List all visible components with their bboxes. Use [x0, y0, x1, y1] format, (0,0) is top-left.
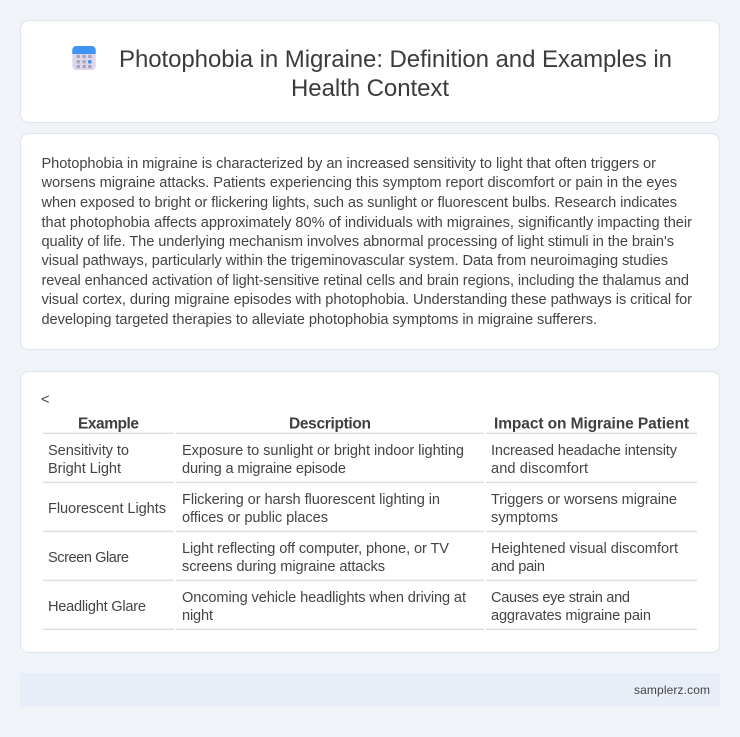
table row: sensitivity to bright light: Bright Light [48, 461, 121, 477]
table row: fluorescent lights: Fluorescent Lights [48, 501, 166, 517]
table row: headlight glare [43, 590, 697, 630]
footer source text: samplerz.com [634, 683, 710, 697]
title: Photophobia in Migraine: Definition and Examples in [119, 46, 672, 73]
icon: calendar grid [72, 46, 96, 70]
table row: sensitivity to bright light: Increased headache intensity [491, 443, 678, 459]
table row: screen glare: Heightened visual discomfort [491, 541, 678, 557]
text block: definition paragraph: visual pathways, particularly within the trigeminovascular system. Data from neuroimaging studies [42, 253, 668, 269]
text block: definition paragraph: quality of life. The underlying mechanism involves abnormal processing of light stimuli in the brain's [42, 234, 674, 250]
table row: headlight glare: aggravates migraine pain [491, 608, 651, 624]
text block: definition paragraph: that photophobia affects approximately 80% of individuals with migraines, significantly impacting their [42, 215, 692, 231]
table row: fluorescent lights: Flickering or harsh fluorescent lighting in [182, 492, 440, 508]
text block: definition paragraph: visual cortex, during migraine episodes with photophobia. Understanding these pathways is critical for [42, 292, 692, 308]
text block: definition paragraph: reveal enhanced activation of light-sensitive retinal cells and brain regions, including the thalamus and [42, 273, 689, 289]
stray bracket character: < [41, 392, 50, 408]
table row: screen glare: Screen Glare [48, 550, 129, 566]
panel: examples table [20, 372, 720, 652]
table row: screen glare [43, 541, 697, 581]
text block: definition paragraph: worsens migraine attacks. Patients experiencing this symptom report discomfort or pain in the eyes [40, 175, 677, 191]
table header: Impact on Migraine Patient [494, 416, 689, 432]
text block: definition paragraph: Photophobia in migraine is characterized by an increased sensitivity to light that often triggers or [42, 156, 656, 172]
table header: Example [78, 416, 139, 432]
table row: screen glare: Light reflecting off computer, phone, or TV [182, 541, 449, 557]
table row: sensitivity to bright light: Sensitivity to [48, 443, 129, 459]
title: Health Context [291, 75, 449, 102]
table row: fluorescent lights: offices or public places [182, 510, 328, 526]
table row: sensitivity to bright light: during a migraine episode [182, 461, 346, 477]
table header: Description [289, 416, 371, 432]
table row: screen glare: and pain [491, 559, 545, 575]
table row: sensitivity to bright light: Exposure to sunlight or bright indoor lighting [182, 443, 464, 459]
footer bar [20, 673, 720, 707]
table row: headlight glare: Causes eye strain and [491, 590, 630, 606]
title [119, 46, 672, 102]
panel: description [20, 134, 720, 350]
table row: headlight glare: Headlight Glare [48, 599, 146, 615]
table row: headlight glare: night [182, 608, 213, 624]
table row: fluorescent lights: symptoms [491, 510, 558, 526]
table header [43, 416, 697, 434]
table row: fluorescent lights [43, 492, 697, 532]
table row: screen glare: screens during migraine attacks [182, 559, 385, 575]
text block: definition paragraph: when exposed to bright or flickering lights, such as sunlight or fluorescent bulbs. Research indicates [40, 195, 677, 211]
text block: definition paragraph [40, 156, 692, 328]
text block: definition paragraph: developing targeted therapies to alleviate photophobia symptoms in migraine sufferers. [42, 312, 597, 328]
table row: sensitivity to bright light: and discomfort [491, 461, 588, 477]
table row: sensitivity to bright light [43, 443, 697, 483]
panel: header [20, 20, 720, 122]
table row: fluorescent lights: Triggers or worsens migraine [491, 492, 677, 508]
table row: headlight glare: Oncoming vehicle headlights when driving at [182, 590, 466, 606]
